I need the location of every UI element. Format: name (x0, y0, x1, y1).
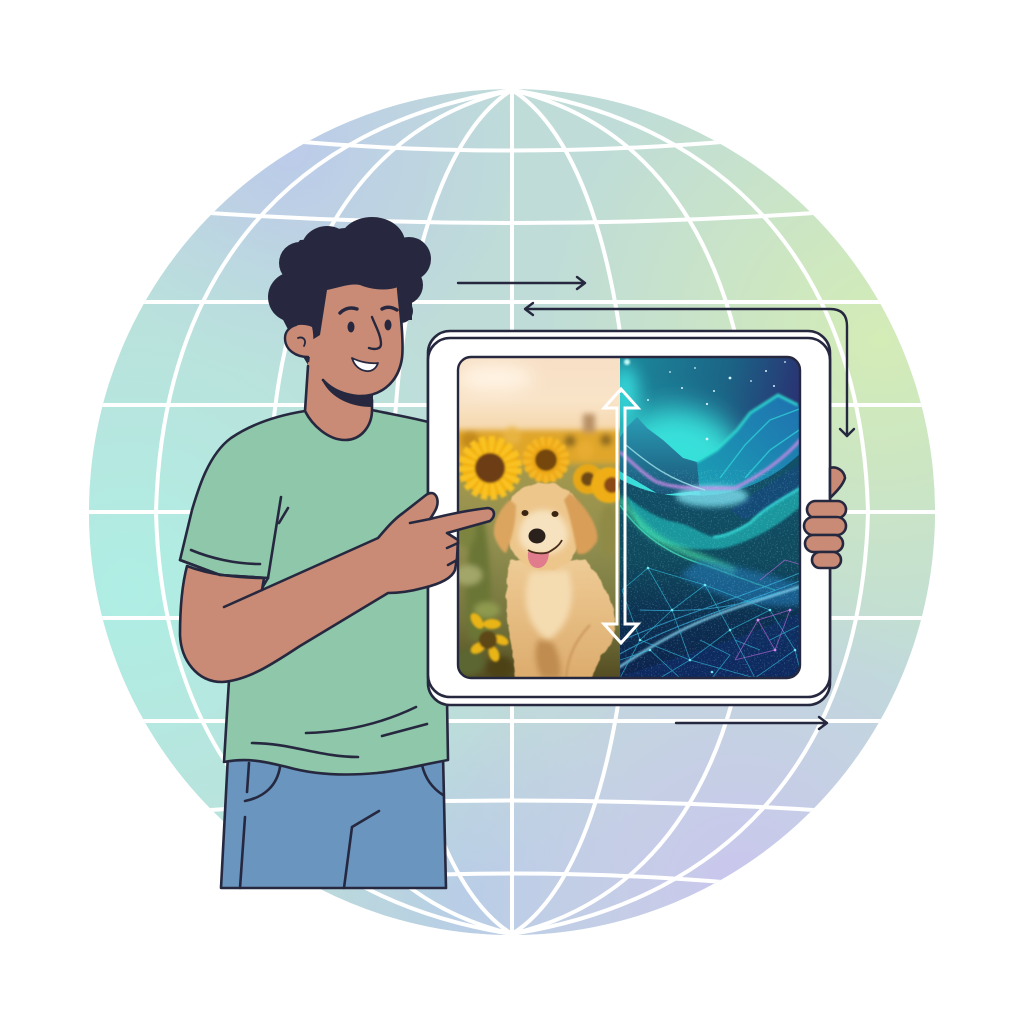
face: nose (369, 317, 381, 349)
blue swell (680, 560, 802, 606)
small sunflower in foreground (468, 611, 510, 663)
pink ridge line (620, 438, 802, 488)
sunflowers (462, 438, 627, 663)
face: eyebrows (340, 307, 397, 313)
person: face (309, 285, 403, 396)
tablet: front frame (428, 338, 830, 697)
forearm crease (224, 590, 262, 607)
puppy: leg shadow (535, 640, 561, 678)
lower terrain (618, 452, 802, 690)
person: neck (305, 362, 372, 440)
arrow: bottom right-pointing (676, 717, 827, 729)
blurred flower row (450, 414, 630, 464)
cyan crest (625, 487, 802, 549)
tablet (428, 331, 830, 705)
face: smile (352, 358, 378, 371)
globe: gradient disc (80, 80, 944, 944)
digital side: neon wireframe landscape (620, 358, 799, 677)
person: ear (285, 325, 313, 357)
puppy: tongue (528, 551, 549, 568)
tablet screen: border (458, 357, 800, 678)
puppy: ears (494, 500, 516, 553)
arm (180, 493, 494, 682)
left mountain (620, 417, 700, 494)
arrow: top right-pointing (458, 277, 585, 289)
face: eyes (348, 320, 392, 332)
thumb (830, 467, 845, 498)
green wave (620, 498, 735, 572)
bright lower waves (618, 586, 802, 668)
leaves and stems (452, 504, 619, 680)
mesh nodes (639, 567, 796, 679)
person: curly hair (268, 217, 431, 365)
white double-headed divider arrow (604, 389, 638, 643)
stars (618, 361, 786, 440)
puppy: body (506, 560, 615, 680)
person: jeans (221, 755, 446, 888)
person: beard shadow (323, 380, 372, 406)
valley glow (676, 485, 748, 507)
fingers (807, 501, 846, 518)
person: t-shirt (180, 410, 448, 775)
photo side: puppy in sunflowers (459, 358, 620, 677)
puppy: eyes and nose (522, 510, 528, 516)
puppy: head (505, 483, 582, 570)
network mesh (620, 568, 802, 678)
globe background (80, 80, 944, 944)
hand lines (410, 519, 430, 523)
person: pointing arm and hand (180, 493, 494, 682)
speckle texture (620, 470, 800, 678)
person: right hand gripping tablet (804, 467, 846, 568)
tablet screen: split image (450, 357, 804, 690)
sleeve hem (180, 560, 268, 578)
globe: meridians and latitude lines (80, 88, 944, 936)
tablet: back frame (428, 331, 830, 705)
puppy: mouth (528, 540, 562, 553)
puppy (494, 483, 615, 680)
right mountain (697, 395, 804, 500)
arrow: elbow from right side to top (525, 303, 854, 436)
